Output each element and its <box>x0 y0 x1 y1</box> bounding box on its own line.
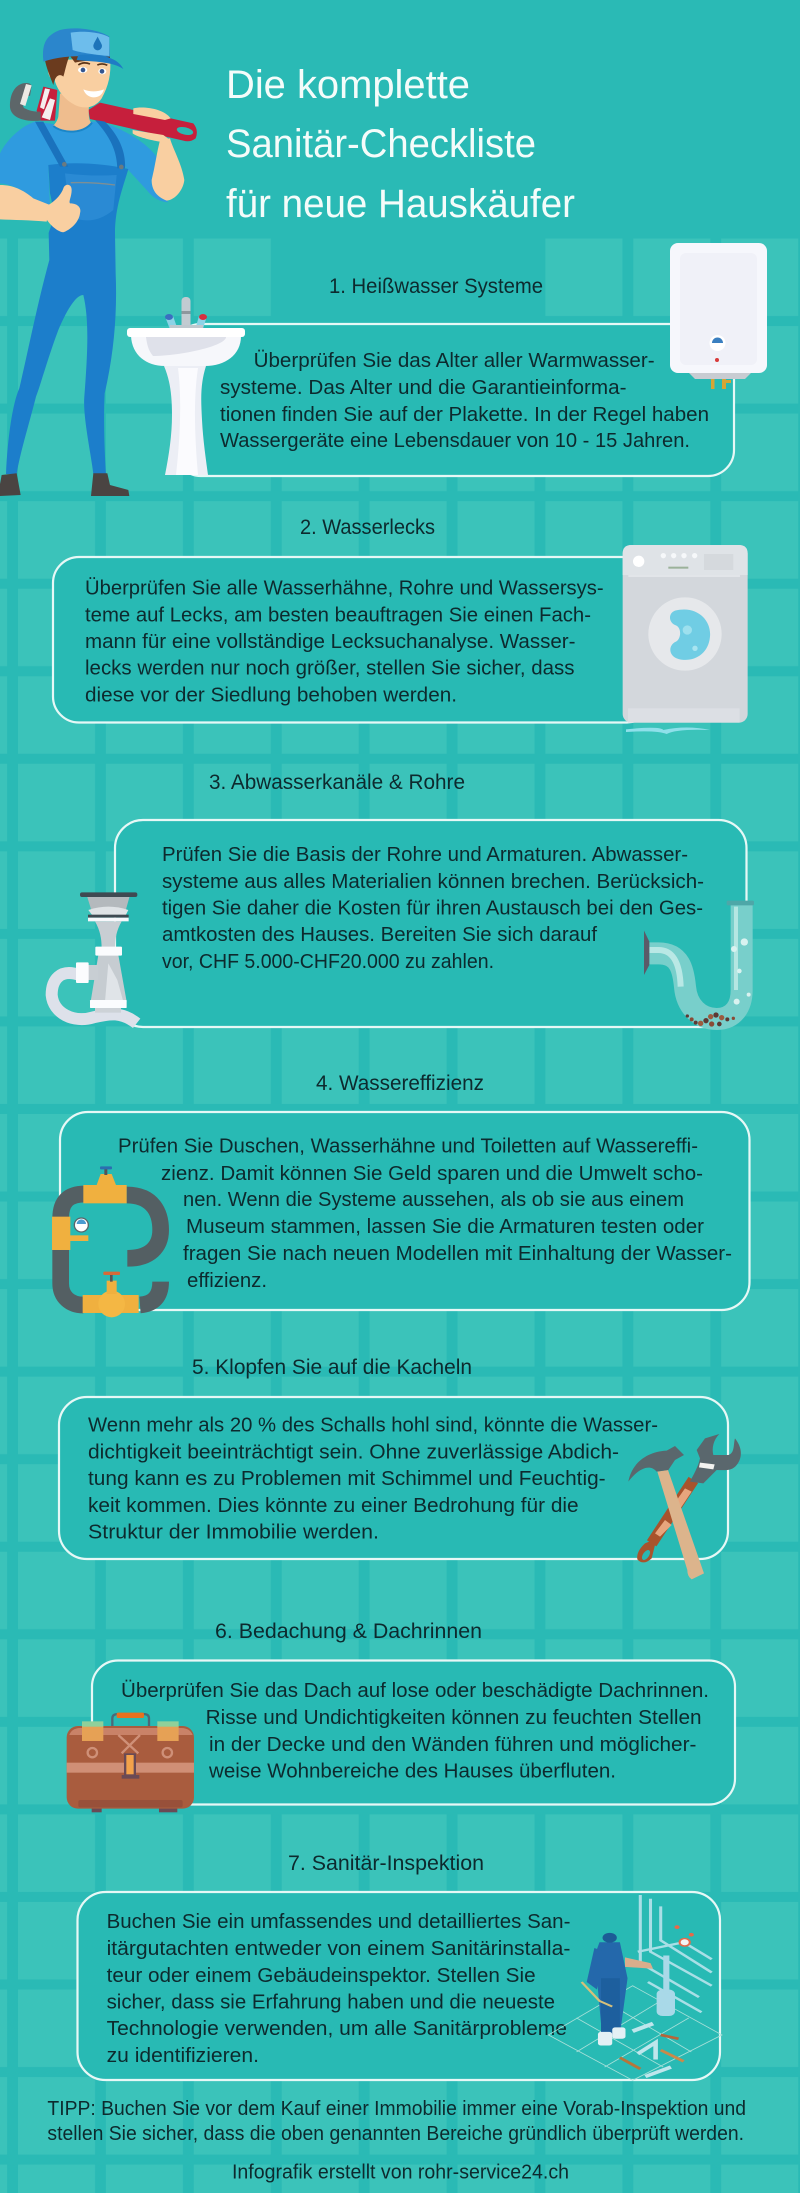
panel: 6 roof and gutters <box>67 1620 735 1812</box>
text block: section 2: teme auf Lecks, am besten beauftragen Sie einen Fach- <box>85 604 591 626</box>
panel: 4 water efficiency <box>52 1072 750 1317</box>
text block: section 3: amtkosten des Hauses. Bereiten Sie sich darauf <box>162 924 597 946</box>
text block: section 2: diese vor der Siedlung behoben werden. <box>85 684 457 706</box>
text block: section 4: zienz. Damit können Sie Geld sparen und die Umwelt scho- <box>161 1163 703 1185</box>
heading: section 6: 6. Bedachung & Dachrinnen <box>215 1620 482 1643</box>
text block: section 7: Technologie verwenden, um alle Sanitärprobleme <box>107 2018 567 2040</box>
icon: sink <box>127 297 245 475</box>
icon: pipe assembly with valves and gauge <box>52 1166 161 1317</box>
text block: section 5 <box>88 1415 658 1544</box>
panel: 1 hot water systems <box>127 243 767 476</box>
shoes <box>0 473 129 496</box>
wrench <box>10 83 197 141</box>
text block: section 1: tionen finden Sie auf der Plakette. In der Regel haben <box>220 404 709 426</box>
text block: section 5: dichtigkeit beeinträchtigt sein. Ohne zuverlässige Abdich- <box>88 1442 619 1464</box>
text block: section 4: effizienz. <box>187 1270 267 1292</box>
tip text: stellen Sie sicher, dass die oben genannten Bereiche gründlich überprüft werden. <box>47 2123 744 2145</box>
shirt <box>0 122 168 207</box>
icon: crossed hammer and wrench <box>628 1434 741 1579</box>
text block: section 3 <box>162 844 704 973</box>
icon: water boiler <box>670 243 767 389</box>
text block: section 5: Struktur der Immobilie werden. <box>88 1522 379 1544</box>
credit line: Infografik erstellt von rohr-service24.ch <box>232 2162 569 2184</box>
text block: section 6: Überprüfen Sie das Dach auf lose oder beschädigte Dachrinnen. <box>121 1680 709 1702</box>
text block: section 7 <box>107 1911 570 2067</box>
text block: section 7: Buchen Sie ein umfassendes und detailliertes San- <box>107 1911 570 1933</box>
panel frame: section 6 <box>92 1660 735 1804</box>
title: Sanitär-Checkliste <box>226 122 536 166</box>
heading: section 2: 2. Wasserlecks <box>300 516 435 539</box>
arms and hands <box>0 107 184 232</box>
text block: section 4: fragen Sie nach neuen Modellen mit Einhaltung der Wasser- <box>183 1243 732 1265</box>
text block: section 2: lecks werden nur noch größer, stellen Sie sicher, dass <box>85 658 574 680</box>
heading: section 4: 4. Wassereffizienz <box>316 1072 484 1095</box>
tip text: TIPP: Buchen Sie vor dem Kauf einer Immobilie immer eine Vorab-Inspektion und <box>47 2098 746 2120</box>
panel frame: section 5 <box>59 1397 728 1559</box>
heading: section 5: 5. Klopfen Sie auf die Kacheln <box>192 1356 472 1379</box>
text block: section 2 <box>85 578 604 706</box>
text block: section 4: Prüfen Sie Duschen, Wasserhähne und Toiletten auf Wassereffi- <box>118 1135 698 1157</box>
panel frame: section 7 <box>78 1892 720 2080</box>
title <box>226 63 575 226</box>
heading: section 1: 1. Heißwasser Systeme <box>329 275 543 298</box>
text block: section 4 <box>118 1135 732 1292</box>
text block: section 7: zu identifizieren. <box>107 2045 259 2067</box>
overalls <box>6 163 128 474</box>
text block: section 7: itärgutachten entweder von einem Sanitärinstalla- <box>107 1938 570 1960</box>
text block: section 3: Prüfen Sie die Basis der Rohre und Armaturen. Abwasser- <box>162 844 688 866</box>
text block: section 2: mann für eine vollständige Lecksuchanalyse. Wasser- <box>85 631 576 653</box>
panel: 7 plumbing inspection <box>78 1852 722 2080</box>
panel: 2 leaks <box>53 516 748 734</box>
tip text <box>47 2098 746 2145</box>
panel frame: section 4 <box>60 1112 750 1310</box>
text block: section 3: systeme aus alles Materialien können brechen. Berücksich- <box>162 871 704 893</box>
text block: section 5: keit kommen. Dies könnte zu einer Bedrohung für die <box>88 1495 579 1517</box>
text block: section 1: Wassergeräte eine Lebensdauer von 10 - 15 Jahren. <box>220 430 690 452</box>
heading: section 7: 7. Sanitär-Inspektion <box>288 1852 484 1875</box>
icon: sink drain siphon <box>52 892 137 1023</box>
icon: toolbox <box>67 1713 194 1812</box>
icon: washing machine <box>623 545 748 734</box>
panel: 3 sewers and pipes <box>52 771 754 1027</box>
panel: 5 tap the tiles <box>59 1356 741 1579</box>
text block: section 6: in der Decke und den Wänden führen und möglicher- <box>209 1734 696 1756</box>
text block: section 3: tigen Sie daher die Kosten für ihren Austausch bei den Ges- <box>162 898 703 920</box>
panel frame: section 2 <box>53 557 653 722</box>
icon: isometric plumber with pipes <box>548 1895 722 2080</box>
text block: section 6 <box>121 1680 709 1782</box>
overall details <box>35 120 125 220</box>
panel frame: section 3 <box>115 820 746 1027</box>
text block: section 1: Überprüfen Sie das Alter aller Warmwasser- <box>254 350 655 372</box>
text block: section 4: Museum stammen, lassen Sie die Armaturen testen oder <box>186 1216 704 1238</box>
text block: section 3: vor, CHF 5.000-CHF20.000 zu zahlen. <box>162 951 494 973</box>
text block: section 5: Wenn mehr als 20 % des Schalls hohl sind, könnte die Wasser- <box>88 1415 658 1437</box>
text block: section 6: weise Wohnbereiche des Hauses überfluten. <box>208 1760 616 1782</box>
title: für neue Hauskäufer <box>226 182 575 226</box>
panel frame: section 1 <box>175 324 734 476</box>
text block: section 5: tung kann es zu Problemen mit Schimmel und Feuchtig- <box>88 1468 606 1490</box>
text block: section 4: nen. Wenn die Systeme aussehen, als ob sie aus einem <box>183 1189 684 1211</box>
text block: section 6: Risse und Undichtigkeiten können zu feuchten Stellen <box>206 1707 702 1729</box>
heading: section 3: 3. Abwasserkanäle & Rohre <box>209 771 465 794</box>
text block: section 1: systeme. Das Alter und die Garantieinforma- <box>220 377 626 399</box>
head <box>43 28 123 132</box>
icon: clogged P-trap <box>644 901 754 1027</box>
text block: section 2: Überprüfen Sie alle Wasserhähne, Rohre und Wassersys- <box>85 578 604 600</box>
text block: section 7: sicher, dass sie Erfahrung haben und die neueste <box>107 1992 555 2014</box>
text block: section 1 <box>220 350 709 452</box>
title: Die komplette <box>226 63 470 107</box>
illustration: plumber with wrench <box>0 28 197 496</box>
text block: section 7: teur oder einem Gebäudeinspektor. Stellen Sie <box>107 1965 536 1987</box>
